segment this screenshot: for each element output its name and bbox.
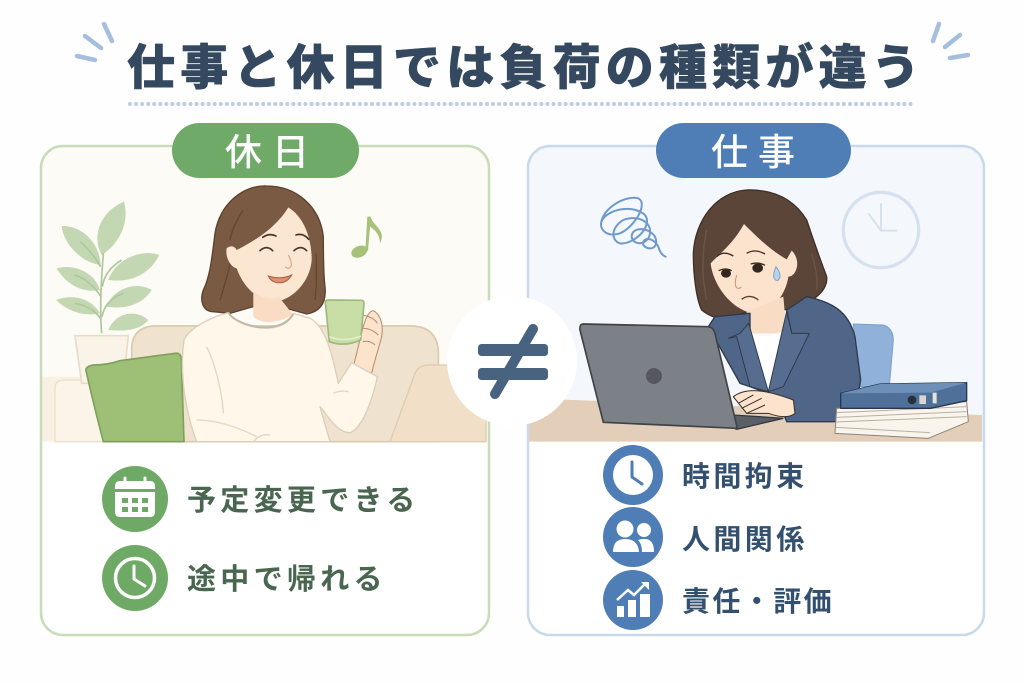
work badge	[656, 123, 851, 178]
icon: clock	[102, 545, 168, 611]
wall clock	[843, 192, 919, 268]
holiday badge	[172, 123, 359, 178]
title: 仕事と休日では負荷の種類が違う	[127, 41, 925, 95]
holiday item: schedule: 予定変更できる	[187, 484, 420, 517]
woman relaxing	[182, 186, 382, 442]
holiday item: leave early	[102, 545, 387, 611]
panel: work	[528, 123, 984, 635]
title sparkle left	[77, 24, 112, 60]
work item: responsibility	[603, 570, 834, 630]
binder and papers	[835, 383, 968, 438]
floor band and sofa	[42, 326, 486, 442]
icon: people	[603, 507, 663, 567]
title sparkle right	[933, 24, 968, 58]
pillow	[86, 353, 184, 442]
work item: relationships	[603, 507, 808, 567]
holiday item: leave early: 途中で帰れる	[187, 563, 387, 596]
plant	[56, 202, 159, 383]
icon: stress scribble	[601, 198, 666, 257]
not equal symbol	[447, 296, 577, 426]
panel: holiday	[41, 123, 489, 635]
holiday badge: 休日	[225, 132, 319, 173]
work item: relationships: 人間関係	[682, 524, 808, 555]
icon: music note	[349, 217, 382, 260]
holiday item: schedule	[102, 466, 420, 532]
work item: time	[603, 445, 808, 505]
work item: responsibility: 責任・評価	[682, 586, 834, 617]
laptop	[580, 324, 783, 429]
chair	[853, 324, 893, 387]
icon: calendar	[102, 466, 168, 532]
mug	[325, 300, 364, 344]
woman at desk	[693, 190, 861, 422]
work item: time: 時間拘束	[682, 461, 808, 492]
icon: growth chart	[603, 570, 663, 630]
icon: clock	[603, 445, 663, 505]
hand	[353, 311, 382, 378]
work illustration	[528, 147, 983, 442]
holiday illustration	[42, 147, 488, 442]
work badge: 仕事	[711, 132, 805, 173]
desk	[528, 398, 982, 442]
